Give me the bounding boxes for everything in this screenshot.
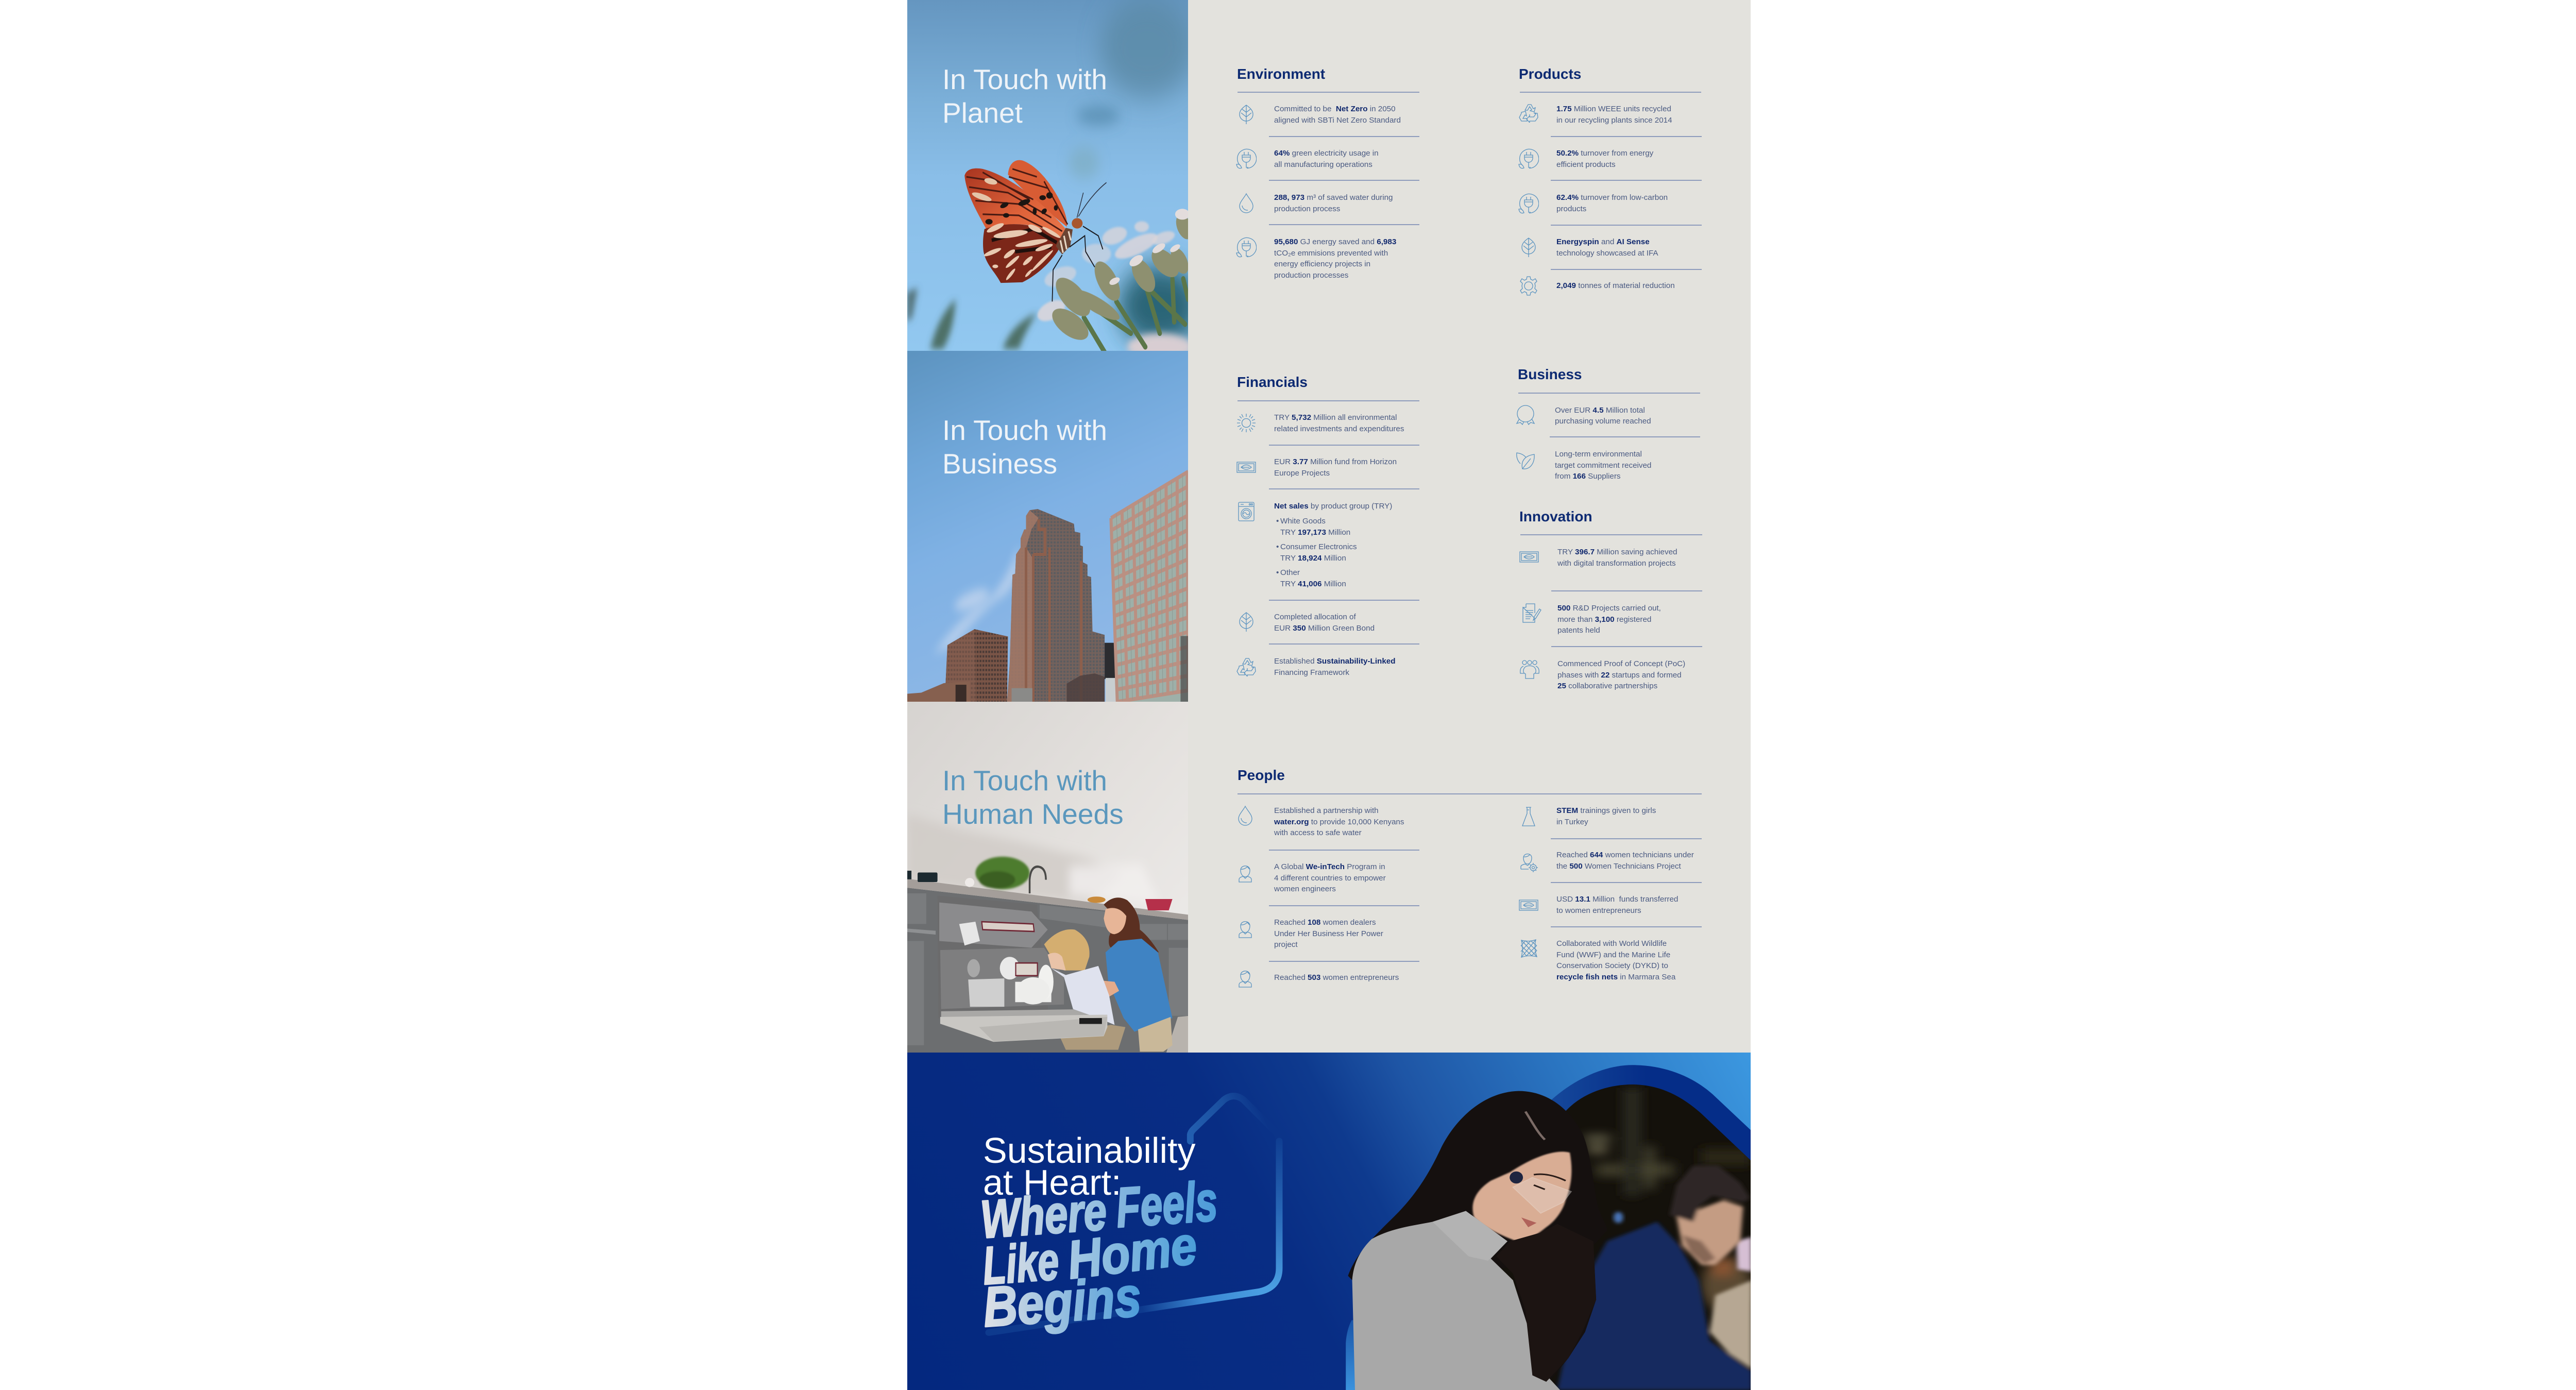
text: water.org: water.org to provide 10,000 Kenyans (1274, 818, 1404, 826)
icon: banknote (1518, 895, 1539, 916)
icon: people (1519, 659, 1540, 680)
text: saved water: 288, 973 m³ of saved water during (1274, 193, 1393, 202)
text: fish nets: recycle fish nets in Marmara Sea (1556, 973, 1675, 981)
text: R&D projects: more than 3,100 registered (1557, 615, 1651, 624)
text: STEM: STEM trainings given to girls (1556, 806, 1656, 815)
icon: recycle (1519, 104, 1538, 123)
heading: In Touch with Planet: In Touch with (942, 63, 1107, 95)
icon: plug (1236, 237, 1257, 258)
icon: banknote (1236, 457, 1257, 478)
stems (1084, 279, 1188, 353)
title: Where Feels Like Home Begins: Where (978, 1181, 1109, 1249)
rule (1520, 534, 1702, 535)
text: energy saved: energy efficiency projects in (1274, 260, 1370, 268)
boy: hair, shirt and trousers (1044, 929, 1090, 971)
text: green electricity: all manufacturing operations (1274, 160, 1372, 169)
title: Where Feels Like Home Begins (907, 1053, 1319, 1390)
text: energyspin (1556, 236, 1658, 259)
text: funds transferred (1556, 894, 1678, 916)
text: suppliers: from 166 Suppliers (1555, 472, 1621, 481)
panel: environment (1109, 66, 1419, 292)
icon: ribbon (1515, 405, 1536, 426)
text: purchasing volume: purchasing volume reached (1555, 417, 1651, 426)
text: sustainability-linked (1274, 656, 1395, 678)
text: WEEE: in our recycling plants since 2014 (1556, 116, 1672, 125)
text: suppliers (1555, 449, 1651, 482)
text: purchasing volume (1555, 405, 1651, 427)
house outline (958, 1077, 1298, 1365)
icon: plug (1236, 148, 1257, 169)
text: net zero (1274, 105, 1401, 125)
text: suppliers: target commitment received (1555, 461, 1651, 470)
heading: In Touch with Human Needs: In Touch with (942, 765, 1107, 796)
text: material reduction: 2,049 tonnes of material reduction (1556, 281, 1675, 290)
text: turnover energy efficient: efficient products (1556, 160, 1616, 169)
heading: In Touch with Human Needs (942, 765, 1124, 830)
small dark building (1105, 643, 1116, 679)
text: fish nets: Collaborated with World Wildlife (1556, 939, 1667, 948)
text: horizon fund (1274, 456, 1397, 479)
text: energy saved: production processes (1274, 271, 1348, 280)
icon: leaf (1239, 105, 1253, 124)
icon: leaf (1236, 612, 1257, 632)
title: Sustainability at Heart: at Heart: (983, 1162, 1121, 1202)
text: proof of concept: phases with 22 startups and formed (1557, 671, 1682, 680)
text: investments: related investments and expenditures (1274, 425, 1404, 433)
text: women dealers: project (1274, 940, 1298, 949)
panel: human needs photo (907, 702, 1188, 1053)
text: water.org: with access to safe water (1274, 828, 1362, 837)
title: Where Feels Like Home Begins: Begins (981, 1266, 1143, 1339)
panel: background of the content area (1188, 0, 1751, 1053)
icon: plug (1518, 194, 1539, 213)
right building (1111, 471, 1188, 702)
woman with glasses and grey sweater (1348, 1091, 1607, 1382)
text: saved water: production process (1274, 205, 1340, 213)
text: investments: TRY 5,732 Million all environmental (1274, 413, 1397, 422)
main tower (1007, 509, 1105, 702)
text: white goods: White Goods (1280, 517, 1326, 526)
bud caps (1109, 209, 1190, 286)
panel: products (1518, 66, 1702, 296)
heading: In Touch with Planet (942, 63, 1107, 282)
text: fish nets (1556, 938, 1675, 982)
text: digital saving (1557, 547, 1677, 569)
dishwasher door (940, 1014, 1107, 1042)
heading: Environment (1237, 66, 1325, 81)
title: Sustainability at Heart: Sustainability (983, 1130, 1195, 1171)
text: women technicians: Reached 644 women technicians under (1556, 851, 1694, 859)
text: green bond: EUR 350 Million Green Bond (1274, 624, 1375, 633)
icon: flask (1518, 806, 1539, 827)
text: energy saved: tCO₂e emmisions prevented with (1274, 249, 1388, 258)
rule (1518, 393, 1700, 394)
text: R&D projects: patents held (1557, 626, 1600, 635)
rule (1520, 92, 1701, 93)
text: turnover energy efficient: 50.2% turnover from energy (1556, 149, 1653, 158)
text: proof of concept: Commenced Proof of Concept (PoC) (1557, 659, 1685, 668)
text: women dealers: Reached 108 women dealers (1274, 918, 1376, 927)
text: turnover low carbon: 62.4% turnover from low-carbon (1556, 193, 1668, 202)
heading: In Touch with Business (942, 414, 1107, 480)
text: green electricity: 64% green electricity usage in (1274, 149, 1379, 158)
icon: sun (1236, 413, 1257, 433)
text: suppliers: Long-term environmental (1555, 450, 1642, 459)
butterfly wings and body (1008, 160, 1067, 227)
text: green bond (1274, 612, 1375, 634)
text: WEEE (1556, 105, 1672, 125)
text: white goods: TRY 197,173 Million (1280, 528, 1350, 537)
text: sustainability-linked: Established Sustainability-Linked (1274, 657, 1395, 666)
text: STEM (1556, 805, 1656, 827)
text: horizon fund: EUR 3.77 Million fund from Horizon (1274, 457, 1397, 466)
title: Where Feels Like Home Begins: Like (980, 1231, 1061, 1296)
icon: washing machine (1236, 501, 1257, 522)
text: water.org: Established a partnership with (1274, 806, 1379, 815)
text: consumer electronics: TRY 18,924 Million (1280, 554, 1346, 563)
icon: fishing net (1518, 938, 1539, 959)
panel: innovation (1515, 505, 1705, 703)
rule (1238, 92, 1419, 93)
text: other: • (1276, 568, 1279, 577)
flower tufts (1035, 221, 1176, 325)
text: energy saved: 95,680 GJ energy saved and 6,983 (1274, 238, 1396, 246)
text: energy saved (1274, 238, 1396, 280)
rule (1238, 793, 1702, 794)
panel: people (1234, 762, 1705, 992)
text: other: TRY 41,006 Million (1280, 580, 1346, 588)
heading: In Touch with Human Needs: Human Needs (942, 798, 1124, 830)
text: consumer electronics: • (1276, 543, 1279, 551)
text: women dealers: Under Her Business Her Power (1274, 929, 1383, 938)
heading: In Touch with Planet: Planet (942, 97, 1023, 129)
dishwasher interior (938, 895, 1049, 1023)
text: women entrepreneurs: Reached 503 women entrepreneurs (1274, 973, 1399, 982)
icon: leaves (1515, 450, 1536, 471)
heading: In Touch with Business: Business (942, 448, 1057, 480)
text: purchasing volume: Over EUR 4.5 Million total (1555, 406, 1645, 415)
icon: person (1235, 862, 1256, 883)
heading: Financials (1237, 374, 1308, 389)
text: energyspin: Energyspin and AI Sense (1556, 238, 1650, 246)
text: funds transferred: USD 13.1 Million funds transferred (1556, 895, 1678, 904)
text: women technicians (1556, 850, 1694, 872)
rule (1238, 400, 1419, 401)
man in navy shirt (1557, 1165, 1752, 1390)
text: funds transferred: to women entrepreneurs (1556, 906, 1641, 915)
panel: bottom banner (907, 1053, 1751, 1390)
text: other: Other (1280, 568, 1300, 577)
text: we-intech: A Global We-inTech Program in (1274, 862, 1385, 871)
text: proof of concept: 25 collaborative partnerships (1557, 682, 1657, 690)
title: Where Feels Like Home Begins: Feels (1114, 1169, 1219, 1240)
text: net zero: Committed to be Net Zero in 2050 (1274, 105, 1396, 113)
text: net sales: Net sales by product group (TRY) (1274, 502, 1392, 511)
icon: technician (1518, 852, 1539, 872)
text: we-intech (1274, 861, 1386, 895)
text: consumer electronics: Consumer Electronics (1280, 543, 1357, 551)
text: we-intech: women engineers (1274, 885, 1336, 893)
text: R&D projects (1557, 603, 1661, 636)
cabinets (907, 888, 1190, 1056)
text: green electricity (1274, 149, 1379, 169)
panel: business (1515, 363, 1703, 492)
text: we-intech: 4 different countries to empower (1274, 874, 1386, 883)
panel: business photo (907, 351, 1188, 702)
counter top (907, 878, 1190, 920)
title: Where Feels Like Home Begins: Home (1064, 1215, 1200, 1290)
text: women technicians: the 500 Women Technicians Project (1556, 862, 1681, 871)
text: other (1276, 567, 1346, 589)
text: turnover low carbon: products (1556, 205, 1586, 213)
text: investments (1274, 412, 1404, 434)
icon: document with pen (1521, 603, 1541, 623)
text: STEM: in Turkey (1556, 818, 1588, 826)
text: digital saving: TRY 396.7 Million saving achieved (1557, 548, 1677, 556)
icon: plug (1518, 148, 1539, 169)
icon: recycle (1236, 656, 1257, 676)
left building (945, 629, 1008, 702)
panel: financials (1234, 371, 1422, 690)
text: net zero: aligned with SBTi Net Zero Standard (1274, 116, 1401, 125)
text: consumer electronics (1276, 541, 1357, 564)
panel: planet photo (907, 0, 1249, 1040)
heading: Innovation (1519, 508, 1592, 524)
text: turnover low carbon (1556, 192, 1668, 214)
text: digital saving: with digital transformation projects (1557, 559, 1676, 568)
text: energyspin: technology showcased at IFA (1556, 249, 1658, 258)
heading: People (1238, 767, 1285, 783)
text: white goods (1276, 516, 1350, 538)
text: proof of concept (1557, 658, 1685, 692)
text: horizon fund: Europe Projects (1274, 469, 1330, 478)
text: white goods: • (1276, 517, 1279, 526)
plant, faucet and items (975, 857, 1030, 889)
text: fish nets: Conservation Society (DYKD) to (1556, 961, 1668, 970)
heading: In Touch with Business: In Touch with (942, 414, 1107, 446)
icon: person (1235, 918, 1256, 939)
icon: banknote (1519, 547, 1539, 567)
text: women dealers (1274, 917, 1383, 951)
text: fish nets: Fund (WWF) and the Marine Life (1556, 951, 1670, 959)
title: Sustainability at Heart (983, 1134, 1195, 1198)
icon: water drop (1235, 805, 1256, 826)
icon: person (1235, 968, 1256, 988)
icon: water drop (1239, 193, 1253, 213)
heading: Products (1519, 66, 1581, 81)
icon: leaf (1518, 237, 1539, 258)
text: WEEE: 1.75 Million WEEE units recycled (1556, 105, 1671, 113)
text: green bond: Completed allocation of (1274, 613, 1356, 621)
woman: hair, face, blouse and trousers (1104, 897, 1159, 952)
text: R&D projects: 500 R&D Projects carried out, (1557, 604, 1661, 613)
text: saved water (1274, 193, 1393, 213)
heading: Business (1518, 366, 1582, 382)
flower buds (1048, 211, 1195, 346)
text: turnover energy efficient (1556, 149, 1654, 169)
text: water.org (1274, 805, 1404, 839)
icon: gear (1518, 276, 1539, 296)
text: sustainability-linked: Financing Framework (1274, 668, 1349, 677)
photo: two people inside arch (1346, 1065, 1751, 1390)
